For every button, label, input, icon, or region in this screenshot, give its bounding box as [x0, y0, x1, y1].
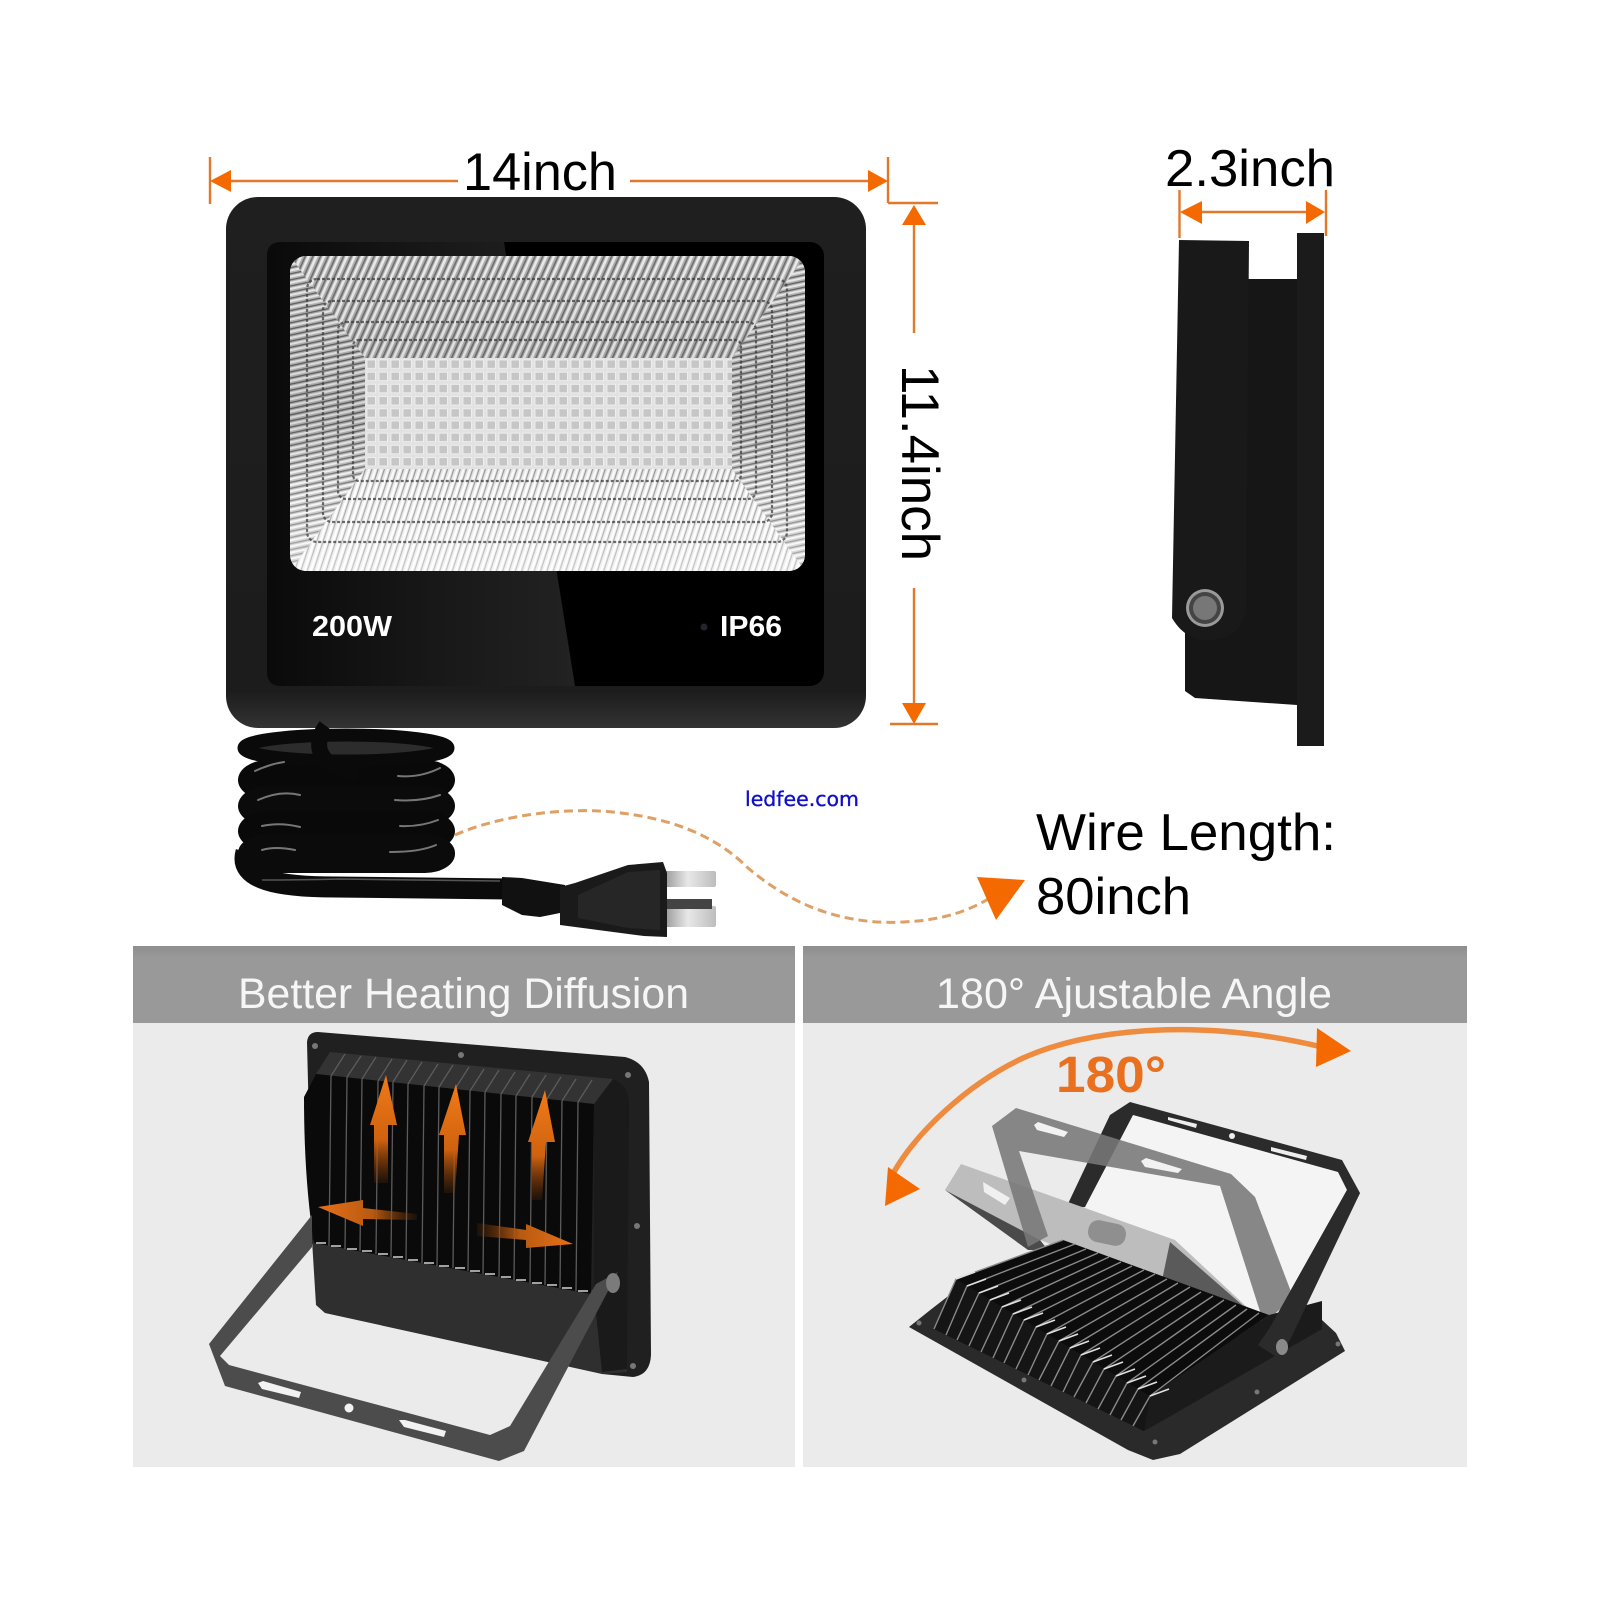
heat sink fins: [934, 1240, 1269, 1431]
bracket bolt: [1186, 589, 1224, 627]
U-shaped mounting bracket: [209, 1215, 618, 1461]
panel background: [133, 1023, 795, 1467]
height dimension: 11.4inch: [888, 203, 949, 724]
right body: [1144, 1301, 1322, 1431]
wire length label: 80inch: [1036, 868, 1191, 926]
panel heading: 180° Ajustable Angle: [936, 970, 1332, 1018]
sensor dot: [700, 624, 708, 630]
LED array: [365, 358, 732, 469]
wire length label: [1036, 804, 1336, 926]
cable to plug: [245, 852, 510, 889]
fin tops: [316, 1052, 613, 1104]
infographic canvas: [133, 148, 1467, 1467]
bracket bolt: [606, 1273, 620, 1293]
rear of light with heat sink: [304, 1032, 651, 1377]
width dimension: 14inch: 14inch: [463, 143, 617, 202]
upright dark bracket: [1066, 1102, 1360, 1344]
height dimension: 11.4inch: 11.4inch: [890, 365, 949, 561]
panel heading: Better Heating Diffusion: [238, 970, 689, 1018]
rear plate: [307, 1032, 651, 1377]
power cord coil: [238, 726, 510, 889]
depth dimension: 2.3inch: [1165, 140, 1335, 238]
front view of flood light: [226, 197, 866, 728]
strain relief: [502, 877, 565, 917]
width dimension: 14inch: [210, 143, 888, 204]
sideways heat arrows: [318, 1200, 573, 1248]
dashed wire length curve: [455, 811, 990, 922]
depth dimension: 2.3inch: 2.3inch: [1165, 140, 1335, 198]
right shoulder: [594, 1079, 629, 1372]
plate screws: [916, 1320, 1340, 1444]
upward heat arrows: [370, 1075, 555, 1200]
plug body: [560, 862, 667, 937]
outer housing: [226, 197, 866, 728]
front plate: [1297, 233, 1324, 746]
base plate: [909, 1290, 1345, 1460]
side view of flood light: [1172, 233, 1324, 746]
wire length label: Wire Length:: [1036, 804, 1336, 862]
panel header: [133, 946, 795, 1023]
cable leaving housing: [319, 726, 358, 773]
plug: [502, 862, 716, 937]
panel background: [803, 1023, 1467, 1467]
top ring: [244, 735, 448, 761]
lowest tilted bracket: [945, 1164, 1264, 1336]
heat sink fins: [304, 1074, 594, 1294]
translucent raised bracket: [992, 1108, 1293, 1324]
housing body: [1185, 279, 1297, 705]
bracket slots: [258, 1381, 446, 1437]
fin bend highlights: [956, 1272, 1169, 1396]
bracket leg and bolt: [1258, 1190, 1360, 1358]
rear of light, tilted: [909, 1190, 1360, 1460]
180 degree arc arrow: [885, 1028, 1351, 1206]
panel: 180 degree adjustable angle: [803, 946, 1467, 1467]
corner screws: [312, 1043, 640, 1369]
lens with ribbed reflector: [290, 256, 805, 571]
lower body: [312, 1240, 627, 1374]
panel: better heating diffusion: [133, 946, 795, 1467]
mounting bracket: [1172, 240, 1249, 640]
180 degree label: 180°: [1056, 1046, 1166, 1103]
panel header: [803, 946, 1467, 1023]
wire length arrowhead: [977, 877, 1025, 920]
wattage label: 200W: [312, 611, 393, 643]
black front glass: [267, 242, 824, 686]
watermark: ledfee.com: [745, 787, 859, 811]
prongs: [660, 871, 716, 927]
IP rating label: IP66: [720, 611, 782, 643]
fin lower faces: [934, 1279, 1150, 1431]
